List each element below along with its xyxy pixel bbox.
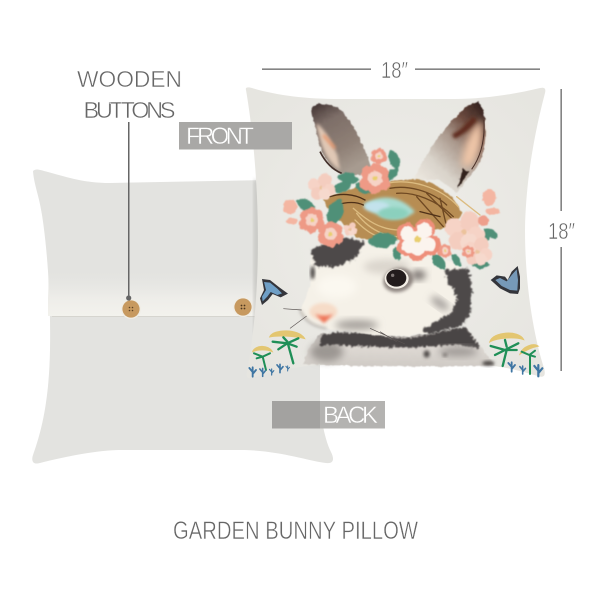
bunny illustration	[283, 102, 495, 366]
title: GARDEN BUNNY PILLOW	[173, 517, 418, 545]
label: front: FRONT	[186, 123, 254, 150]
floral wreath	[283, 148, 500, 273]
heading: wooden buttons: WOODEN	[77, 66, 182, 92]
panel: back of pillow	[32, 169, 333, 464]
whiskers	[283, 309, 405, 344]
label: back	[272, 401, 385, 429]
button flap	[48, 272, 320, 317]
head	[300, 240, 471, 336]
icon: wooden button left	[121, 299, 141, 319]
dimension: width 18 inches: 18″	[381, 57, 408, 83]
back pillow body	[32, 169, 333, 464]
right ear	[413, 102, 485, 193]
nest with eggs	[323, 179, 480, 240]
plants bottom left	[249, 331, 304, 377]
label: back: BACK	[323, 402, 378, 429]
body	[303, 328, 495, 366]
plants bottom right	[490, 333, 542, 376]
icon: butterfly right	[491, 266, 520, 294]
left ear	[312, 104, 372, 175]
dimension: height 18 inches: 18″	[548, 218, 575, 244]
nose	[300, 303, 337, 328]
icon: wooden button right	[233, 297, 253, 317]
heading: wooden buttons: BUTTONS	[84, 97, 176, 123]
panel: front of pillow	[246, 87, 545, 378]
icon: butterfly left	[260, 279, 288, 305]
neck shading	[310, 327, 494, 366]
callout line: wooden buttons	[126, 122, 131, 301]
panel: front pillow shadow	[254, 180, 259, 375]
eye	[380, 264, 416, 296]
label: front	[179, 122, 292, 150]
front pillow body	[246, 87, 545, 378]
heading: wooden buttons	[77, 66, 182, 123]
head dark fur	[311, 237, 472, 334]
